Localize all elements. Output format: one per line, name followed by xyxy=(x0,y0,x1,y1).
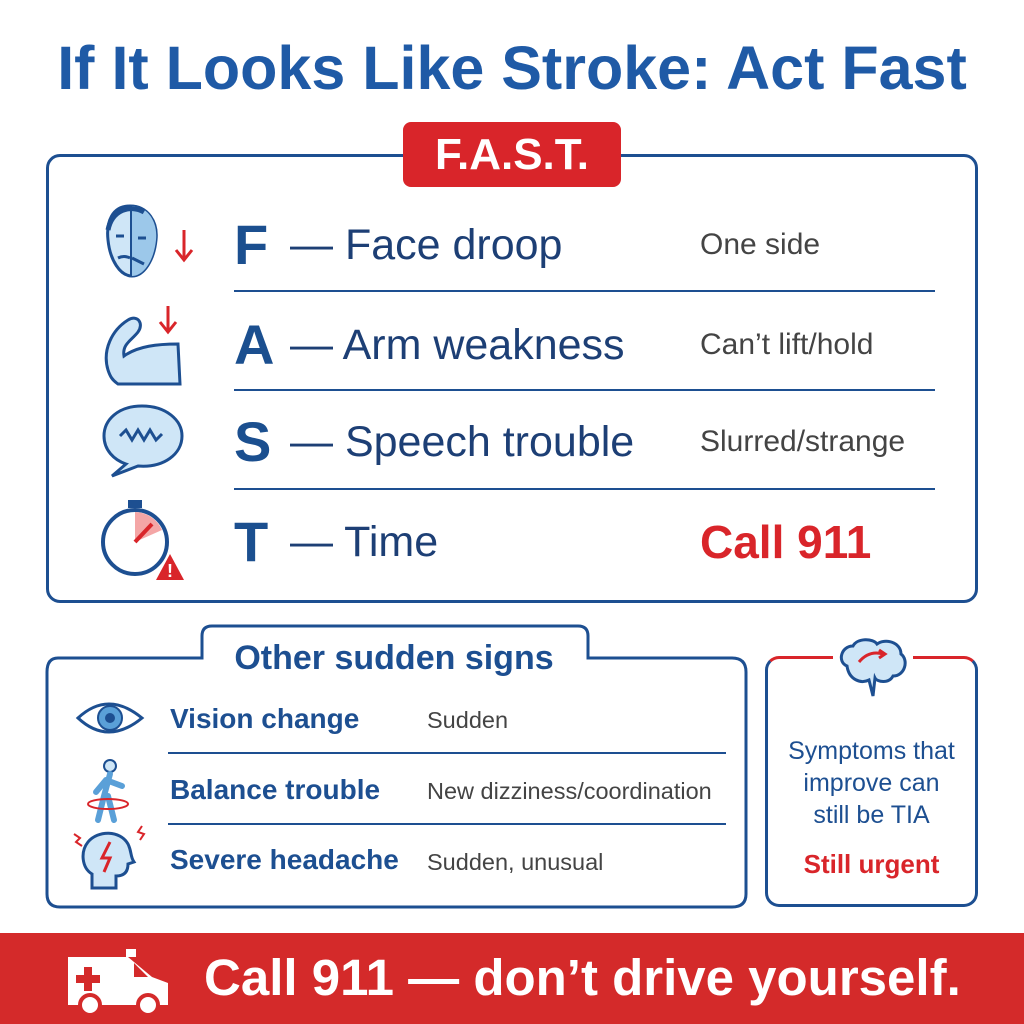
icon: stopwatch xyxy=(101,500,184,581)
text: New dizziness/coordination xyxy=(427,778,712,804)
icon: brain xyxy=(833,638,913,696)
row: A: Can’t lift/hold xyxy=(700,328,873,361)
icon: face xyxy=(106,204,194,278)
title: If It Looks Like Stroke: Act Fast xyxy=(57,34,967,102)
row: T xyxy=(101,500,871,581)
panel: TIA xyxy=(765,656,978,907)
icon: stopwatch: ! xyxy=(167,561,173,581)
text: Sudden xyxy=(427,707,508,733)
text: still urgent: Still urgent xyxy=(804,849,939,879)
text: TIA note: still be TIA xyxy=(813,801,930,829)
sign: balance: Balance trouble xyxy=(170,774,380,805)
icon: speech bubble xyxy=(102,404,184,478)
banner: call 911 xyxy=(0,933,1024,1024)
row: F: One side xyxy=(700,228,820,261)
row: F: — Face droop xyxy=(290,221,562,269)
row: A: — Arm weakness xyxy=(290,321,625,369)
panel: FAST xyxy=(46,154,978,603)
text: TIA note: Symptoms that xyxy=(788,737,955,765)
icon: balance xyxy=(87,759,129,823)
text: TIA note: improve can xyxy=(803,769,940,797)
text: Sudden, unusual xyxy=(427,849,603,875)
row: S: Slurred/strange xyxy=(700,425,905,458)
row: T: — Time xyxy=(290,518,438,566)
text: TIA note xyxy=(788,737,955,829)
sign: headache: Severe headache xyxy=(170,844,399,875)
text: banner: Call 911 — don’t drive yourself. xyxy=(204,949,961,1006)
heading: other sudden signs: Other sudden signs xyxy=(234,639,554,677)
icon: arm xyxy=(104,306,182,386)
panel: other sudden signs xyxy=(46,624,748,908)
sign: vision: Vision change xyxy=(170,703,359,734)
icon: ambulance xyxy=(68,949,168,1013)
icon: headache xyxy=(74,826,146,890)
icon: eye xyxy=(76,702,144,734)
badge: F.A.S.T. xyxy=(403,122,621,187)
badge: F.A.S.T.: F.A.S.T. xyxy=(435,130,589,179)
row: S: — Speech trouble xyxy=(290,418,634,466)
row: T: Call 911 xyxy=(700,516,871,568)
row: A: A xyxy=(234,313,274,376)
row: S xyxy=(102,404,905,478)
row: T: T xyxy=(234,510,268,573)
row: A xyxy=(104,306,873,386)
row: F: F xyxy=(234,213,268,276)
row: S: S xyxy=(234,410,271,473)
row: F xyxy=(106,204,820,278)
